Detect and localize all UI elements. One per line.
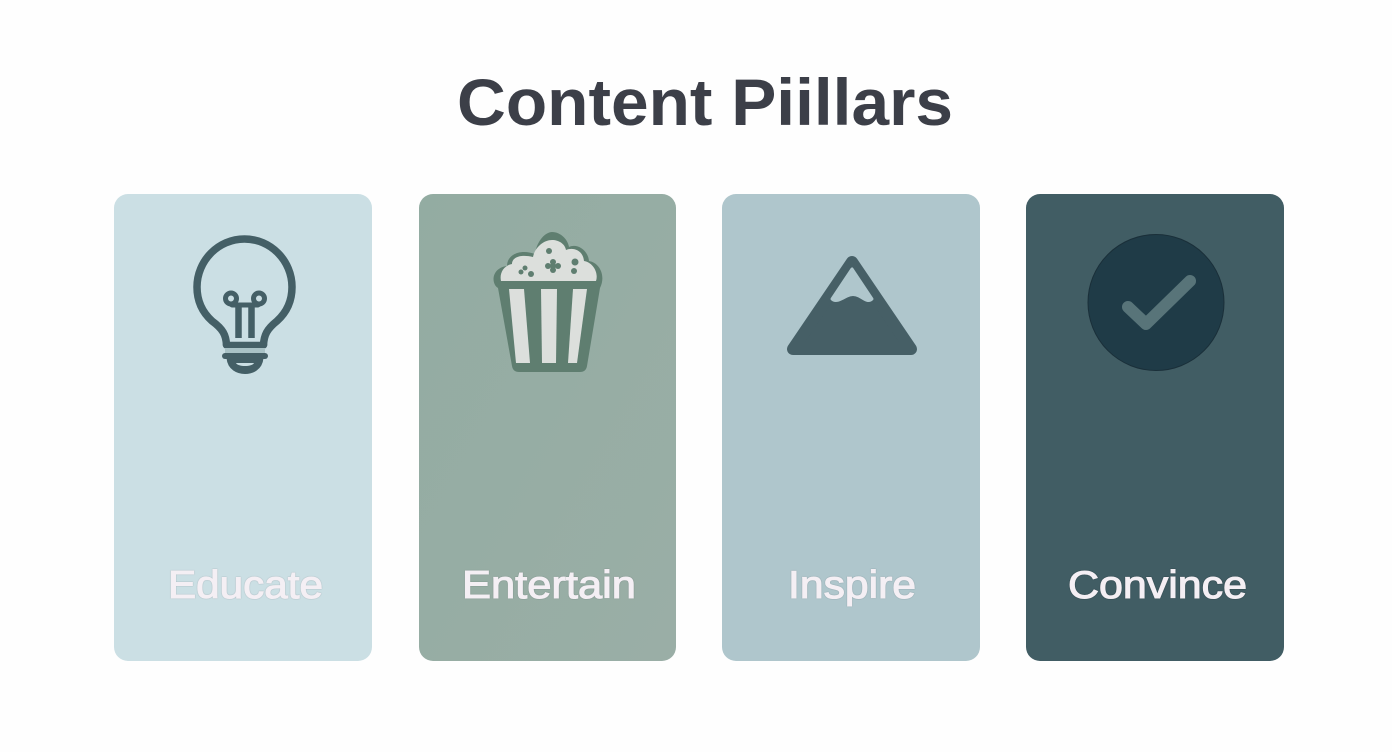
panel: Entertain bbox=[419, 194, 676, 661]
icon: light bulb bbox=[197, 239, 292, 372]
label: Educate: Educate bbox=[168, 564, 323, 607]
panel: Educate bbox=[114, 194, 372, 661]
label: Entertain: Entertain bbox=[462, 564, 636, 607]
panel: Inspire bbox=[722, 194, 980, 661]
panel: Convince bbox=[1026, 194, 1284, 661]
title: Content Piillars bbox=[457, 65, 953, 139]
icon: check circle bbox=[1088, 234, 1224, 370]
label: Convince: Convince bbox=[1068, 564, 1247, 607]
label: Inspire: Inspire bbox=[788, 564, 916, 607]
icon: popcorn bucket bbox=[494, 232, 602, 372]
icon: mountain bbox=[793, 262, 911, 349]
